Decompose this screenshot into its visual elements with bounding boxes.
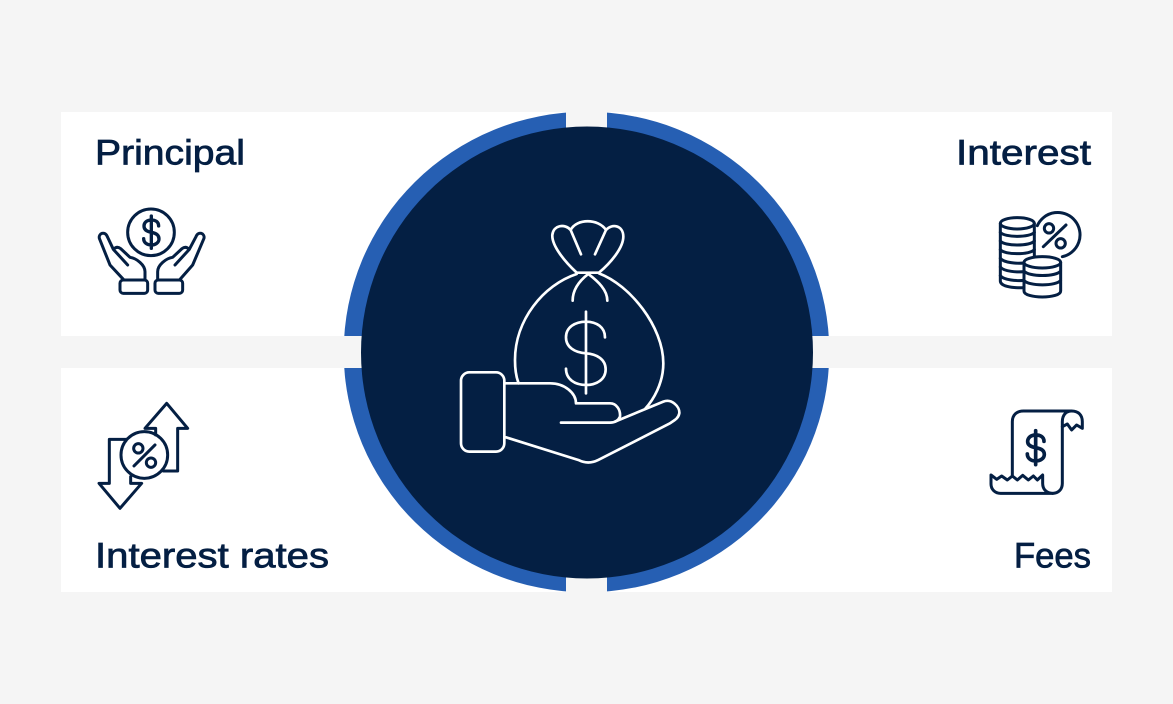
icon: hand holding money bag <box>461 221 679 462</box>
panel: interest <box>607 112 1112 336</box>
central navy circle <box>361 126 813 578</box>
icon: up and down arrows with percent <box>99 403 188 508</box>
icon: coin stacks with percent <box>1000 212 1080 297</box>
panel: interest rates <box>61 368 566 592</box>
icon: hands with dollar coin <box>99 209 204 293</box>
heading: fees: Fees <box>1014 536 1091 576</box>
panel: fees <box>607 368 1112 592</box>
heading: interest rates: Interest rates <box>95 536 329 576</box>
heading: principal: Principal <box>95 134 245 172</box>
heading: interest: Interest <box>956 134 1091 172</box>
icon: receipt with dollar <box>991 411 1082 493</box>
blue segmented ring <box>344 112 829 592</box>
panel: principal <box>61 112 566 336</box>
